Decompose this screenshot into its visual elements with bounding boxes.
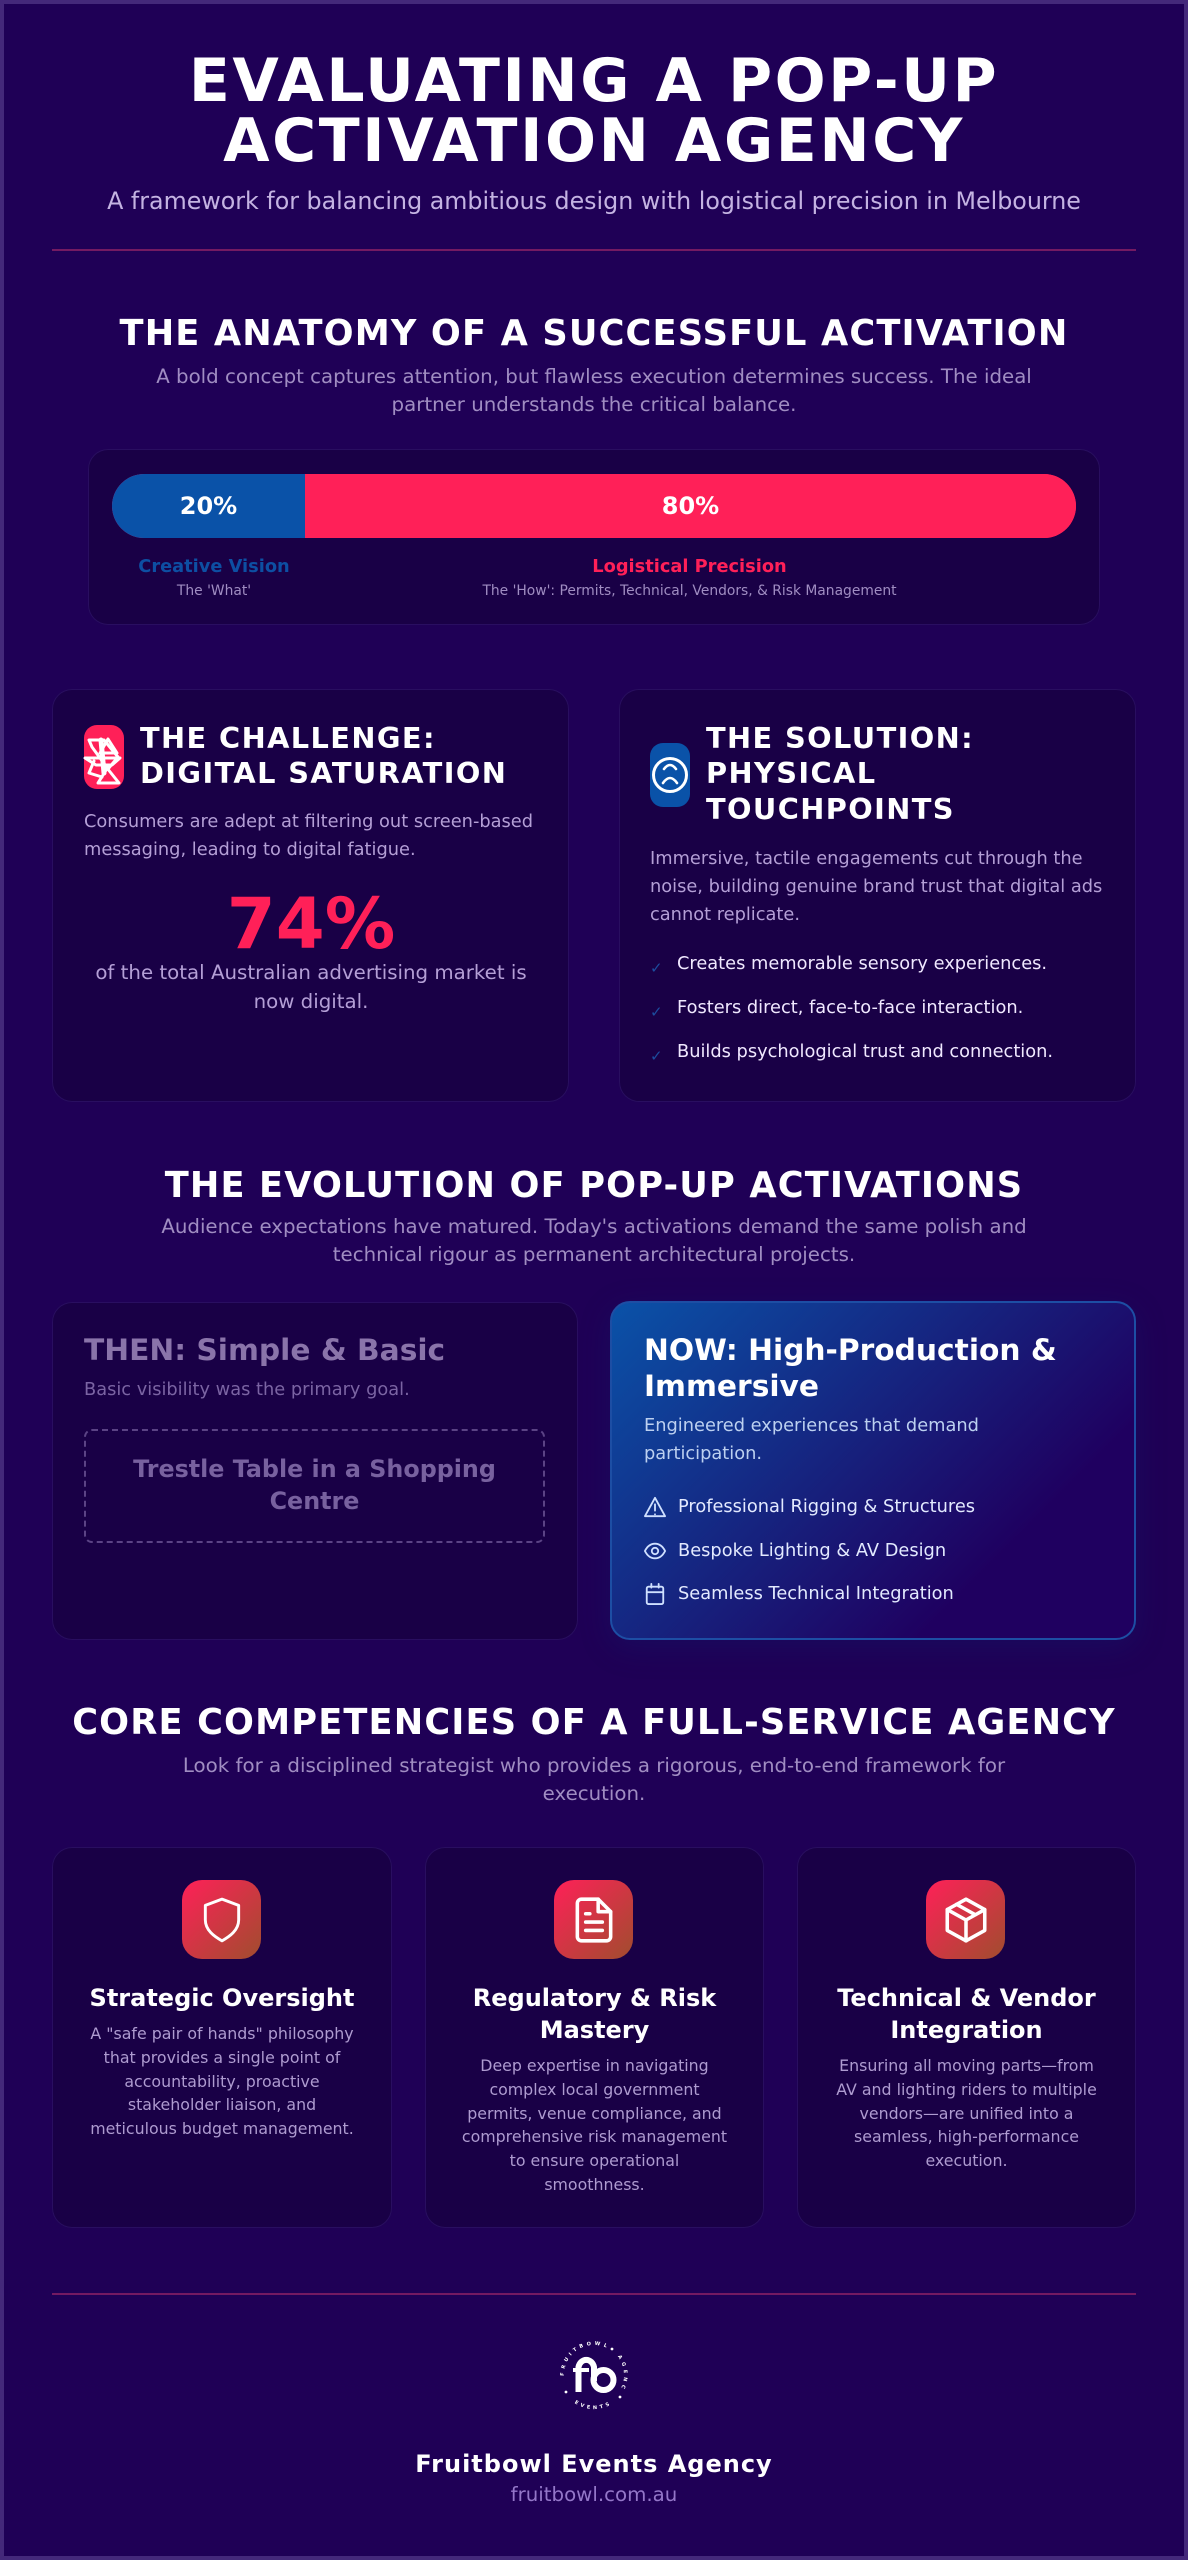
card text: complex local government bbox=[489, 2080, 700, 2099]
benefit list: ✓ bbox=[650, 1046, 663, 1064]
card text: permits, venue compliance, and bbox=[467, 2104, 722, 2123]
label: logistical precision bbox=[482, 556, 897, 599]
heading: NOW: High-Production & bbox=[644, 1333, 1057, 1368]
heading: THE SOLUTION: bbox=[706, 721, 974, 755]
stat caption bbox=[95, 961, 527, 1013]
label: creative vision: The 'What' bbox=[177, 583, 251, 599]
logo: fruitbowl fb mark: FRUITBOWL bbox=[560, 2341, 606, 2376]
benefit list: Fosters direct, face-to-face interaction. bbox=[677, 996, 1023, 1018]
list item bbox=[650, 953, 1047, 977]
card text bbox=[90, 2024, 354, 2138]
card text: A "safe pair of hands" philosophy bbox=[90, 2024, 354, 2043]
card text bbox=[462, 2056, 727, 2194]
panel: balance bar bbox=[88, 449, 1100, 625]
intro text: Look for a disciplined strategist who provides a rigorous, end-to-end framework for bbox=[183, 1754, 1005, 1777]
intro text: technical rigour as permanent architectural projects. bbox=[333, 1243, 855, 1266]
segment: logistical precision 80% bbox=[305, 474, 1076, 538]
panel: the challenge bbox=[52, 689, 569, 1102]
body text bbox=[650, 848, 1102, 924]
card text: AV and lighting riders to multiple bbox=[836, 2080, 1097, 2099]
section heading: evolution bbox=[161, 1165, 1027, 1266]
intro text bbox=[183, 1754, 1006, 1805]
body text: messaging, leading to digital fatigue. bbox=[84, 839, 416, 860]
body text: Engineered experiences that demand bbox=[644, 1415, 979, 1436]
benefit list bbox=[650, 953, 1053, 1064]
title: ACTIVATION AGENCY bbox=[223, 106, 965, 176]
card text: Deep expertise in navigating bbox=[480, 2056, 709, 2075]
card text: accountability, proactive bbox=[124, 2072, 320, 2091]
intro text: A bold concept captures attention, but flawless execution determines success. The ideal bbox=[156, 365, 1032, 388]
company name: Fruitbowl Events Agency bbox=[415, 2450, 773, 2478]
body text: noise, building genuine brand trust that digital ads bbox=[650, 876, 1102, 896]
body text bbox=[84, 811, 533, 860]
icon: fragmented triangles bbox=[84, 725, 124, 789]
card text: vendors—are unified into a bbox=[860, 2104, 1073, 2123]
panel: now bbox=[610, 1301, 1136, 1640]
card: regulatory and risk mastery bbox=[425, 1847, 764, 2228]
intro text bbox=[156, 365, 1032, 416]
segment: logistical precision 80%: 80% bbox=[662, 492, 719, 520]
heading: THEN: Simple & Basic bbox=[84, 1333, 445, 1368]
heading: THE EVOLUTION OF POP-UP ACTIVATIONS bbox=[165, 1165, 1023, 1206]
title bbox=[189, 46, 999, 176]
stat caption: of the total Australian advertising market is bbox=[95, 961, 527, 984]
dashed box: trestle table bbox=[84, 1429, 545, 1543]
heading bbox=[706, 721, 974, 826]
segment: creative vision 20%: 20% bbox=[180, 492, 237, 520]
panel: then bbox=[52, 1302, 578, 1640]
card text: seamless, high-performance bbox=[854, 2127, 1079, 2146]
intro text bbox=[161, 1215, 1027, 1266]
card title: Mastery bbox=[540, 2016, 649, 2044]
icon: document bbox=[554, 1880, 633, 1959]
stat caption: now digital. bbox=[254, 990, 368, 1013]
heading: TOUCHPOINTS bbox=[706, 792, 955, 826]
heading: DIGITAL SATURATION bbox=[140, 756, 507, 790]
body text: cannot replicate. bbox=[650, 904, 800, 924]
intro text: Audience expectations have matured. Today's activations demand the same polish and bbox=[161, 1215, 1027, 1238]
card title: Regulatory & Risk bbox=[473, 1984, 716, 2012]
intro text: execution. bbox=[543, 1782, 645, 1805]
benefit list: Builds psychological trust and connection. bbox=[677, 1040, 1053, 1062]
heading: Immersive bbox=[644, 1369, 819, 1404]
card title: Integration bbox=[890, 2016, 1043, 2044]
body text bbox=[644, 1415, 979, 1464]
intro text: partner understands the critical balance. bbox=[392, 393, 796, 416]
card text bbox=[836, 2056, 1097, 2170]
heading: CORE COMPETENCIES OF A FULL-SERVICE AGENCY bbox=[72, 1702, 1116, 1743]
label: creative vision: Creative Vision bbox=[138, 556, 290, 577]
card title bbox=[473, 1984, 717, 2044]
logo: fruitbowl fb mark bbox=[560, 2341, 628, 2410]
card text: to ensure operational bbox=[510, 2151, 679, 2170]
card text: execution. bbox=[925, 2151, 1008, 2170]
segment: creative vision 20% bbox=[112, 474, 305, 538]
title: EVALUATING A POP-UP bbox=[189, 46, 999, 116]
list item bbox=[650, 1040, 1053, 1064]
heading: THE ANATOMY OF A SUCCESSFUL ACTIVATION bbox=[120, 312, 1068, 354]
card: technical and vendor integration bbox=[797, 1847, 1136, 2228]
card text: smoothness. bbox=[544, 2175, 645, 2194]
section heading: core competencies bbox=[72, 1702, 1116, 1805]
dashed box: trestle table: Centre bbox=[270, 1487, 359, 1515]
icon: circle with chevrons bbox=[650, 743, 690, 807]
logo: fruitbowl fb mark: AGENCY bbox=[618, 2356, 628, 2389]
header bbox=[107, 46, 1081, 215]
benefit list: ✓ bbox=[650, 959, 663, 977]
icon: eye bbox=[644, 1542, 666, 1560]
body text: Immersive, tactile engagements cut through the bbox=[650, 848, 1083, 868]
feature: rigging: Professional Rigging & Structures bbox=[678, 1496, 975, 1516]
benefit list: ✓ bbox=[650, 1002, 663, 1020]
list item bbox=[650, 996, 1023, 1020]
heading bbox=[644, 1333, 1057, 1404]
icon: package box bbox=[926, 1880, 1005, 1959]
card text: stakeholder liaison, and bbox=[128, 2095, 316, 2114]
website: fruitbowl.com.au bbox=[511, 2483, 677, 2506]
heading: PHYSICAL bbox=[706, 756, 876, 790]
card: strategic oversight bbox=[52, 1847, 392, 2228]
label: logistical precision: Logistical Precision bbox=[592, 556, 787, 577]
card title bbox=[837, 1984, 1096, 2044]
card text: comprehensive risk management bbox=[462, 2127, 727, 2146]
bar: 20 / 80 split bbox=[112, 474, 1076, 538]
body text: Basic visibility was the primary goal. bbox=[84, 1379, 410, 1400]
stat: 74%: 74% bbox=[227, 882, 395, 964]
dashed box: trestle table: Trestle Table in a Shopping bbox=[133, 1455, 496, 1483]
heading: THE CHALLENGE: bbox=[140, 721, 436, 755]
body text: Consumers are adept at filtering out screen-based bbox=[84, 811, 533, 832]
label: creative vision bbox=[138, 556, 290, 599]
section: anatomy of a successful activation bbox=[88, 312, 1100, 625]
icon: warning triangle bbox=[644, 1496, 666, 1518]
icon: calendar bbox=[646, 1583, 664, 1605]
card text: Ensuring all moving parts—from bbox=[839, 2056, 1094, 2075]
footer bbox=[415, 2341, 773, 2506]
logo: fruitbowl fb mark: EVENTS bbox=[574, 2400, 609, 2410]
feature: integration: Seamless Technical Integration bbox=[678, 1582, 954, 1604]
icon: shield bbox=[182, 1880, 261, 1959]
card title: Technical & Vendor bbox=[837, 1984, 1096, 2012]
body text: participation. bbox=[644, 1443, 762, 1464]
card text: meticulous budget management. bbox=[90, 2119, 354, 2138]
panel: the solution bbox=[619, 689, 1136, 1102]
feature: lighting: Bespoke Lighting & AV Design bbox=[678, 1540, 946, 1560]
label: logistical precision: The 'How': Permits, Technical, Vendors, & Risk Management bbox=[482, 583, 897, 599]
subtitle: A framework for balancing ambitious design with logistical precision in Melbourne bbox=[107, 187, 1081, 215]
card title: Strategic Oversight bbox=[90, 1984, 354, 2012]
heading bbox=[140, 721, 507, 790]
benefit list: Creates memorable sensory experiences. bbox=[677, 953, 1047, 974]
card text: that provides a single point of bbox=[104, 2048, 340, 2067]
